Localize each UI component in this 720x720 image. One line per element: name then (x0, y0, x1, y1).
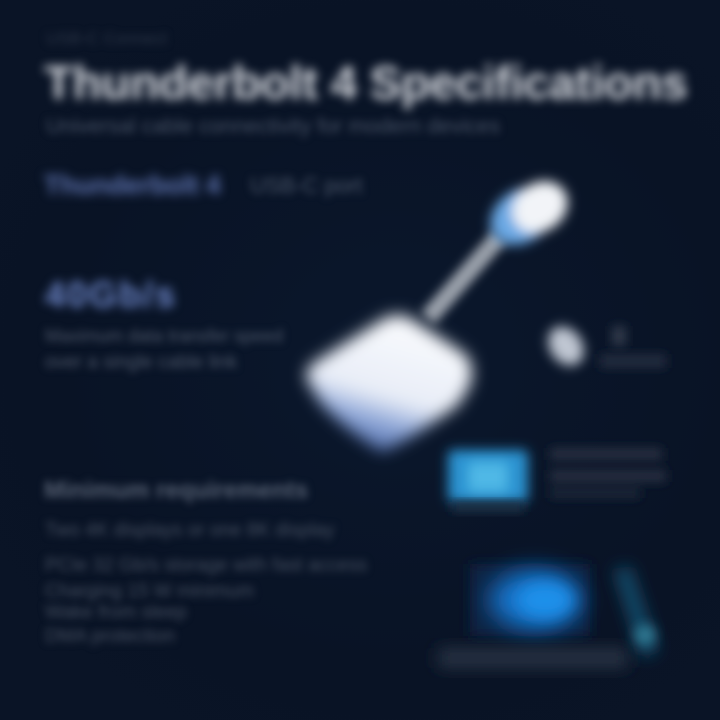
icon: laptop and phone (438, 564, 658, 668)
requirement line 4: Wake from sleep (45, 602, 187, 623)
laptop screen glow (489, 570, 581, 630)
cable (428, 236, 500, 318)
phone (614, 566, 658, 658)
laptop base (438, 648, 628, 668)
speed description line 1: Maximum data transfer speed (45, 326, 283, 346)
feature heading with note (40, 168, 364, 200)
connector head (479, 171, 578, 257)
icon: adapter with cable (306, 171, 578, 452)
speed description line 2: over a single cable link (45, 352, 237, 373)
icon: display (448, 450, 528, 512)
requirement line 3: Charging 15 W minimum (45, 581, 254, 602)
laptop screen (470, 564, 590, 636)
icon: small port dot (541, 320, 591, 372)
eyebrow label: USB-C Connect (46, 29, 167, 48)
small port label (600, 326, 666, 368)
adapter body (306, 315, 472, 452)
requirements heading: Minimum requirements (44, 477, 308, 504)
requirement line 1: Two 4K displays or one 8K display (45, 520, 334, 541)
speed value: 40Gb/s (45, 274, 177, 315)
display description (550, 448, 666, 498)
title: Thunderbolt 4 Specifications (44, 57, 687, 110)
requirement line 2: PCIe 32 Gb/s storage with fast access (45, 555, 367, 576)
requirements text block (41, 477, 368, 647)
subtitle: Universal cable connectivity for modern devices (46, 114, 500, 138)
speed stat block (40, 274, 284, 374)
requirement line 5: DMA protection (45, 626, 175, 647)
feature note: USB-C port (250, 173, 362, 198)
feature heading: Thunderbolt 4 (44, 170, 221, 200)
